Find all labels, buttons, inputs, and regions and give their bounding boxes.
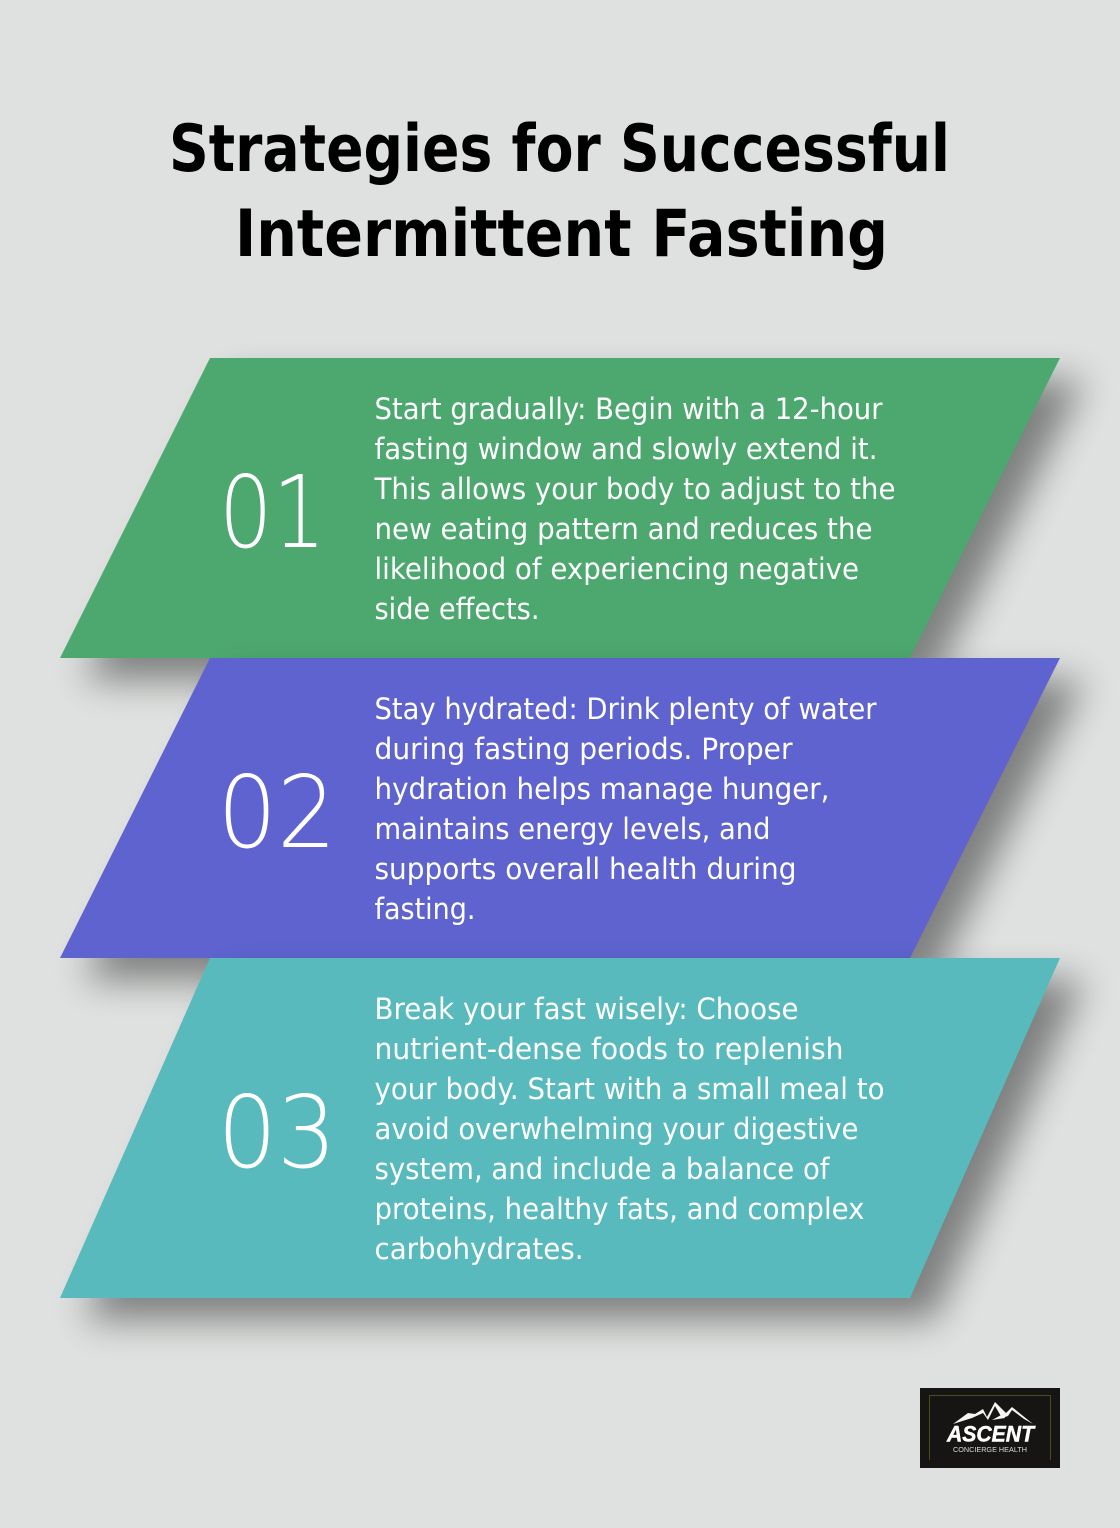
step 3 text: Break your fast wisely: Choose bbox=[374, 992, 798, 1026]
step 1 text: new eating pattern and reduces the bbox=[374, 512, 872, 546]
step 3 text bbox=[374, 992, 884, 1266]
step 3 text: your body. Start with a small meal to bbox=[374, 1072, 884, 1106]
step 3 text: proteins, healthy fats, and complex bbox=[374, 1192, 864, 1226]
step number 01: 01 bbox=[219, 454, 326, 571]
step 3 text: carbohydrates. bbox=[374, 1232, 584, 1266]
panel: step 1 bbox=[60, 358, 1084, 680]
step 3 text: nutrient-dense foods to replenish bbox=[374, 1032, 844, 1066]
icon: mountains bbox=[953, 1402, 1033, 1424]
logo: Ascent Concierge Health: ASCENT bbox=[946, 1422, 1035, 1446]
title bbox=[169, 112, 950, 272]
step 2 text: during fasting periods. Proper bbox=[374, 732, 793, 766]
step 1 text: fasting window and slowly extend it. bbox=[374, 432, 878, 466]
step number 02: 02 bbox=[218, 754, 336, 871]
title: Intermittent Fasting bbox=[235, 197, 888, 272]
panel: step 3 bbox=[60, 958, 1084, 1320]
panel: step 2 bbox=[60, 658, 1084, 980]
logo: Ascent Concierge Health bbox=[920, 1388, 1060, 1468]
step 1 text: Start gradually: Begin with a 12-hour bbox=[374, 392, 883, 426]
step 2 text: supports overall health during bbox=[374, 852, 796, 886]
step 1 text: likelihood of experiencing negative bbox=[374, 552, 859, 586]
step 1 text: side effects. bbox=[374, 592, 540, 626]
step 2 text bbox=[374, 692, 877, 926]
title: Strategies for Successful bbox=[169, 112, 950, 187]
step 2 text: maintains energy levels, and bbox=[374, 812, 770, 846]
step 3 text: avoid overwhelming your digestive bbox=[374, 1112, 858, 1146]
step 3 text: system, and include a balance of bbox=[374, 1152, 830, 1186]
step 1 text: This allows your body to adjust to the bbox=[374, 472, 896, 506]
step number 03: 03 bbox=[218, 1074, 336, 1191]
logo: Ascent Concierge Health: CONCIERGE HEALTH bbox=[953, 1447, 1027, 1454]
step 2 text: hydration helps manage hunger, bbox=[374, 772, 830, 806]
step 2 text: fasting. bbox=[374, 892, 476, 926]
step 1 text bbox=[374, 392, 896, 626]
step 2 text: Stay hydrated: Drink plenty of water bbox=[374, 692, 877, 726]
